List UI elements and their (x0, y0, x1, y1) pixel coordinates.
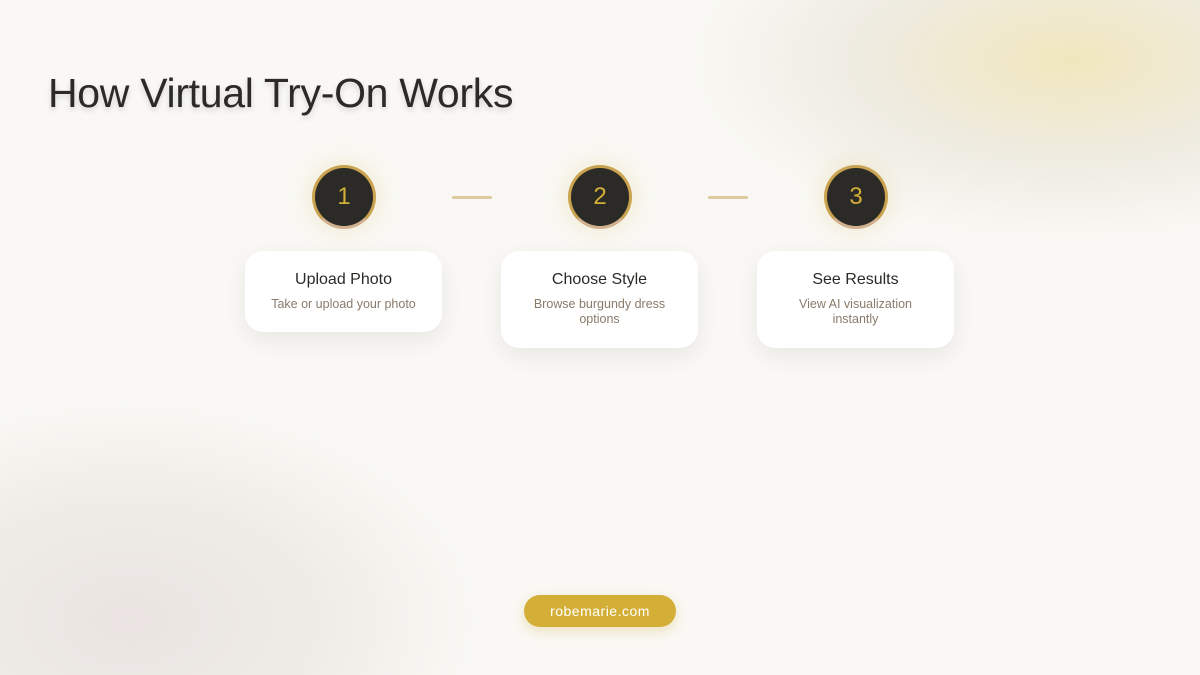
step 3 circle: 3 (849, 183, 863, 210)
card: choose style: Browse burgundy dress options (534, 297, 665, 326)
step 1 circle (312, 165, 376, 229)
card: choose style (501, 251, 698, 348)
card: see results (757, 251, 954, 348)
card: upload photo: Upload Photo (295, 271, 392, 288)
title: How Virtual Try-On Works (48, 70, 513, 116)
card: choose style: Choose Style (552, 271, 647, 288)
card: see results: View AI visualization instantly (799, 297, 912, 326)
step 1 circle: 1 (337, 183, 351, 210)
card: upload photo (245, 251, 442, 332)
step 3 circle (824, 165, 888, 229)
card: see results: See Results (812, 271, 899, 288)
card: upload photo: Take or upload your photo (271, 297, 416, 311)
step 2 circle: 2 (593, 183, 607, 210)
footer pill (524, 595, 676, 627)
connector 1 (452, 196, 492, 199)
connector 2 (708, 196, 748, 199)
step 2 circle (568, 165, 632, 229)
footer pill: robemarie.com (550, 603, 650, 619)
